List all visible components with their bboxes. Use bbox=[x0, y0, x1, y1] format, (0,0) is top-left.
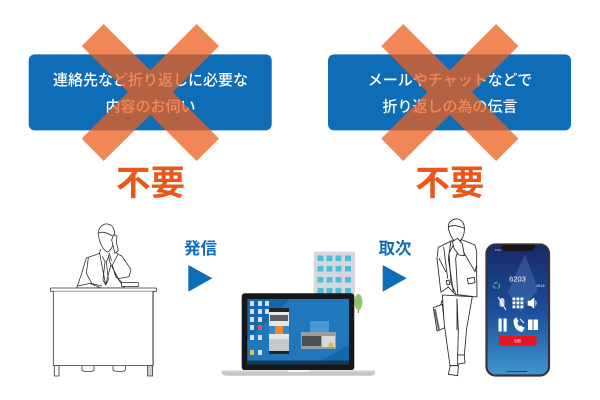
laptop bbox=[222, 293, 375, 376]
icon: speaker bbox=[528, 298, 536, 308]
blue message box right: メールやチャットなどで bbox=[368, 72, 532, 89]
home indicator bbox=[507, 370, 527, 373]
icon: book bbox=[528, 320, 538, 330]
illustration: office PC bbox=[222, 252, 375, 376]
cross mark left bbox=[82, 24, 219, 161]
blue message box right: 折り返しの為の伝言 bbox=[382, 98, 518, 116]
blue message box left: 連絡先など折り返しに必要な bbox=[53, 72, 248, 89]
step label: outgoing call: 発信 bbox=[184, 239, 218, 258]
status bar time: 9:41 bbox=[495, 248, 501, 252]
hand holding phone bbox=[452, 238, 464, 256]
jacket bbox=[437, 240, 477, 297]
head bbox=[448, 219, 464, 242]
desk bbox=[50, 288, 157, 376]
illustration: walking man bbox=[433, 219, 477, 376]
tree bbox=[354, 294, 362, 313]
arrow: to laptop bbox=[188, 265, 212, 292]
laptop base bbox=[222, 370, 375, 376]
panel: not required right bbox=[328, 24, 571, 203]
man on telephone bbox=[77, 224, 138, 288]
shoes bbox=[448, 366, 458, 376]
notch bbox=[501, 245, 535, 251]
label: not required right: 不要 bbox=[415, 165, 484, 203]
phone body bbox=[486, 244, 549, 376]
blue message box left: 内容のお伺い bbox=[105, 98, 196, 116]
icon: transfer bbox=[514, 318, 524, 332]
recording icon bbox=[494, 282, 500, 288]
dialog window bbox=[301, 332, 336, 349]
red hang-up button: 切断 bbox=[514, 338, 522, 343]
building bbox=[314, 252, 355, 294]
legs bbox=[442, 295, 472, 366]
blue message box left bbox=[29, 54, 272, 130]
icon: mute bbox=[498, 297, 506, 310]
briefcase bbox=[433, 301, 445, 331]
label: not required left: 不要 bbox=[116, 165, 185, 203]
cross mark right bbox=[381, 24, 518, 161]
step label: forward: 取次 bbox=[378, 239, 412, 258]
blue message box right bbox=[328, 54, 571, 130]
call number: 6203 bbox=[509, 274, 526, 284]
arrow: to smartphone bbox=[383, 265, 407, 292]
softphone window bbox=[269, 308, 289, 354]
illustration: caller at desk bbox=[50, 224, 157, 376]
illustration: smartphone call screen bbox=[486, 244, 549, 376]
icon: hold bbox=[498, 318, 507, 332]
panel: not required left bbox=[29, 24, 272, 203]
call timer: 00:16 bbox=[537, 284, 545, 288]
icon: keypad bbox=[512, 298, 523, 308]
